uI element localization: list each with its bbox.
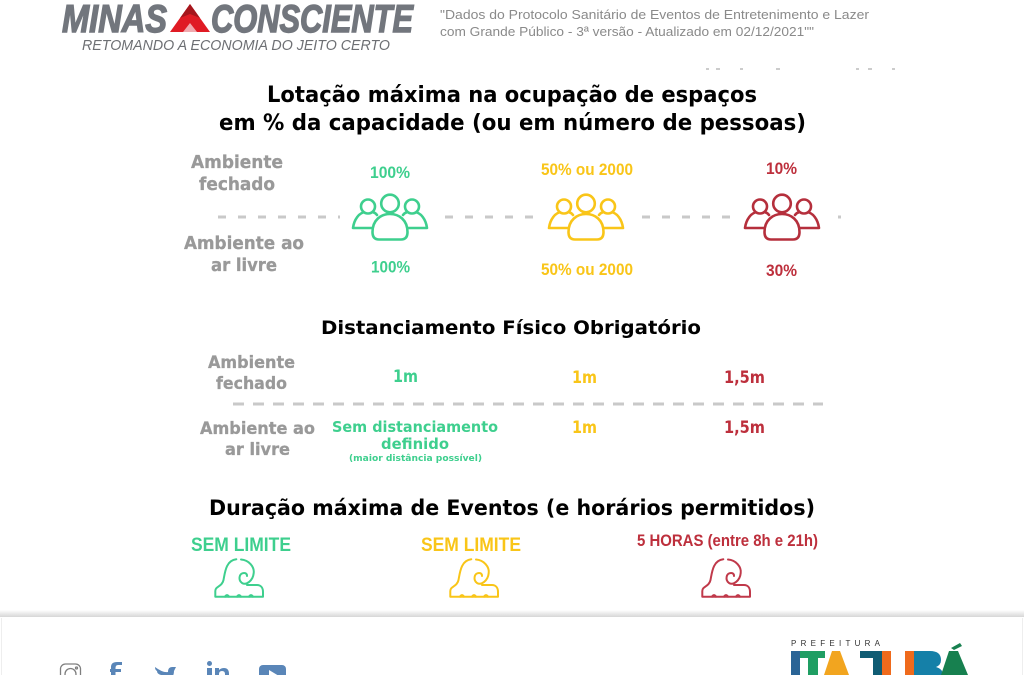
icon: people green — [353, 195, 427, 240]
logo: Prefeitura Itajubá — [791, 639, 968, 675]
icon: youtube — [259, 665, 286, 675]
label: ambiente ao ar livre: ar livre — [225, 440, 290, 460]
logo: Minas Consciente: RETOMANDO A ECONOMIA DO JEITO CERTO — [82, 38, 390, 54]
icon: instagram — [60, 664, 80, 675]
section 1 heading: lotação máxima — [219, 83, 806, 136]
label: ambiente ao ar livre — [184, 233, 304, 276]
distance: green column: 1m — [393, 367, 418, 387]
distance: red column — [724, 368, 765, 438]
distance: red column: 1,5m — [724, 368, 765, 388]
duration: red — [637, 531, 818, 597]
duration: green — [191, 535, 291, 597]
logo: Prefeitura Itajubá: PREFEITURA — [791, 639, 881, 648]
icon: linkedin — [207, 661, 229, 675]
label: ambiente ao ar livre: ar livre — [211, 255, 277, 276]
distance: yellow column: 1m — [572, 368, 597, 388]
label: ambiente fechado: fechado — [199, 174, 275, 195]
section 1 heading: lotação máxima: Lotação máxima na ocupação de espaços — [267, 83, 757, 108]
icon: wave yellow — [450, 559, 498, 597]
distance: green column: (maior distância possível) — [349, 454, 482, 464]
header source note — [440, 7, 870, 39]
icon: wave green — [215, 559, 263, 597]
capacity: green column: 100% — [370, 163, 410, 182]
capacity: red column — [745, 159, 819, 280]
label: ambiente ao ar livre: Ambiente ao — [200, 419, 315, 439]
footer panel — [0, 610, 1024, 675]
capacity: red column: 10% — [766, 159, 797, 178]
label: ambiente fechado: Ambiente — [191, 152, 283, 173]
label: ambiente fechado — [191, 152, 283, 195]
capacity: green column — [353, 163, 427, 276]
capacity: yellow column: 50% ou 2000 — [541, 160, 633, 179]
duration: red: 5 HORAS (entre 8h e 21h) — [637, 531, 818, 550]
icon: facebook — [110, 662, 122, 675]
capacity: yellow column: 50% ou 2000 — [541, 260, 633, 279]
duration: green: SEM LIMITE — [191, 535, 291, 556]
duration: yellow: SEM LIMITE — [421, 535, 521, 556]
label: ambiente fechado: fechado — [216, 374, 287, 394]
section 1 heading: lotação máxima: em % da capacidade (ou em número de pessoas) — [219, 111, 806, 136]
distance: red column: 1,5m — [724, 418, 765, 438]
label: ambiente fechado: Ambiente — [208, 353, 295, 373]
capacity: green column: 100% — [371, 258, 410, 276]
label: ambiente ao ar livre: Ambiente ao — [184, 233, 304, 254]
icon: wave red — [702, 559, 750, 597]
duration: yellow — [421, 535, 521, 597]
icon: red mountain triangle — [170, 4, 210, 32]
header source note: "Dados do Protocolo Sanitário de Eventos de Entretenimento e Lazer — [440, 7, 870, 22]
header source note: com Grande Público - 3ª versão - Atualizado em 02/12/2021"" — [440, 24, 814, 39]
icon: people red — [745, 195, 819, 240]
section 2 heading: distanciamento: Distanciamento Físico Obrigatório — [321, 317, 701, 339]
icon: people yellow — [549, 195, 623, 240]
distance: yellow column — [572, 368, 597, 438]
label: ambiente ao ar livre — [200, 419, 315, 460]
capacity: red column: 30% — [766, 261, 797, 280]
logo: Minas Consciente — [62, 0, 414, 54]
distance: green column: Sem distanciamento — [332, 418, 498, 436]
capacity: yellow column — [541, 160, 633, 279]
distance: green column — [332, 367, 498, 464]
distance: green column: definido — [381, 435, 449, 453]
distance: yellow column: 1m — [572, 418, 597, 438]
icon: twitter — [155, 667, 176, 675]
social icons — [60, 661, 286, 675]
section 3 heading: duração: Duração máxima de Eventos (e horários permitidos) — [209, 496, 815, 520]
label: ambiente fechado — [208, 353, 295, 394]
